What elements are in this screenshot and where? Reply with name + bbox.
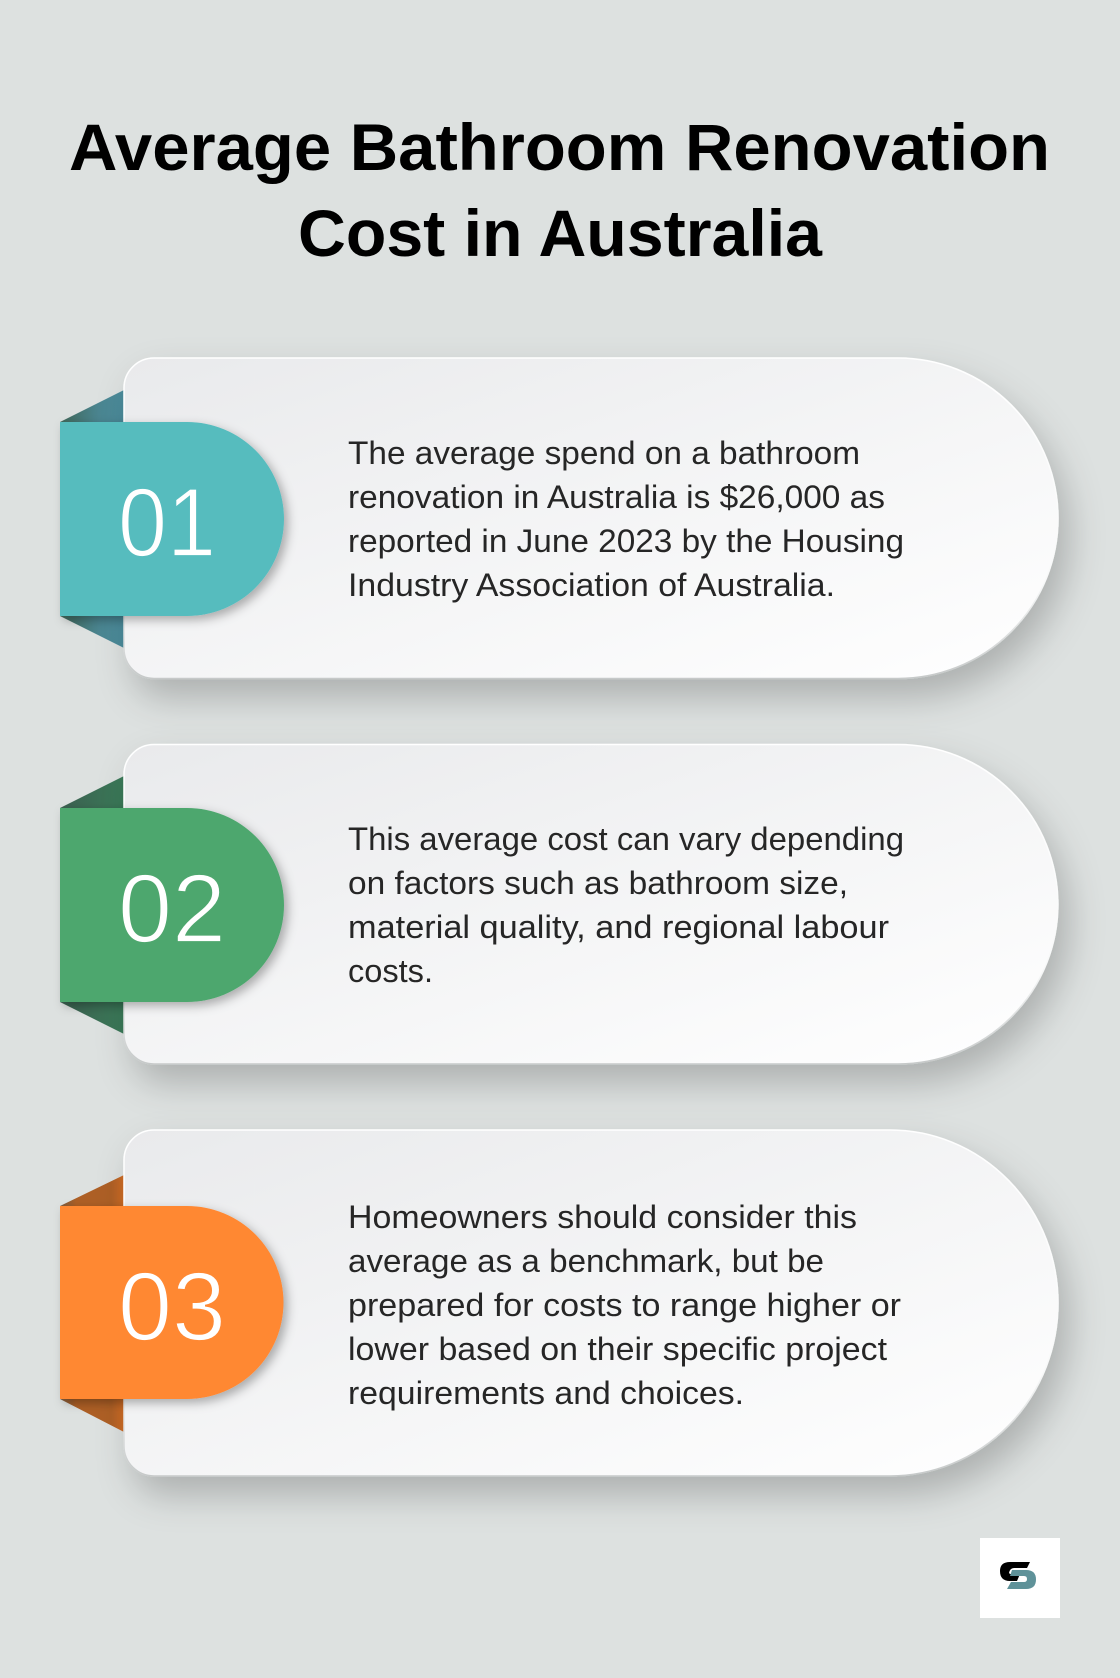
text 02: This average cost can vary depending: [348, 821, 904, 857]
text 02: costs.: [348, 953, 433, 989]
ribbon folds 01: [60, 390, 124, 648]
panel: step 01: [60, 358, 1058, 678]
panel: step 03: [60, 1130, 1058, 1476]
text 01: The average spend on a bathroom: [348, 435, 860, 471]
text 03: lower based on their specific project: [348, 1331, 887, 1367]
text 03: Homeowners should consider this: [348, 1199, 857, 1235]
title: [69, 110, 1050, 270]
text 01: [348, 435, 904, 603]
badge 03: [60, 1206, 284, 1399]
text 03: requirements and choices.: [348, 1375, 744, 1411]
text 03: prepared for costs to range higher or: [348, 1287, 901, 1323]
text 01: Industry Association of Australia.: [348, 567, 835, 603]
number 01: 01: [118, 468, 216, 577]
card 01: [124, 358, 1058, 678]
number 03: 03: [118, 1252, 226, 1361]
icon: logo: [980, 1538, 1060, 1618]
text 02: [348, 821, 904, 989]
title: Average Bathroom Renovation: [69, 110, 1050, 184]
number 02: 02: [118, 854, 226, 963]
text 01: reported in June 2023 by the Housing: [348, 523, 904, 559]
card 02: [124, 744, 1058, 1064]
ribbon folds 02: [60, 776, 124, 1034]
card 03: [124, 1130, 1058, 1476]
text 03: average as a benchmark, but be: [348, 1243, 824, 1279]
ribbon folds 03: [60, 1175, 124, 1432]
text 02: on factors such as bathroom size,: [348, 865, 848, 901]
badge 01: [60, 422, 284, 616]
text 02: material quality, and regional labour: [348, 909, 889, 945]
text 03: [348, 1199, 901, 1411]
badge 02: [60, 808, 284, 1002]
text 01: renovation in Australia is $26,000 as: [348, 479, 885, 515]
title: Cost in Australia: [298, 196, 823, 270]
panel: step 02: [60, 744, 1058, 1064]
